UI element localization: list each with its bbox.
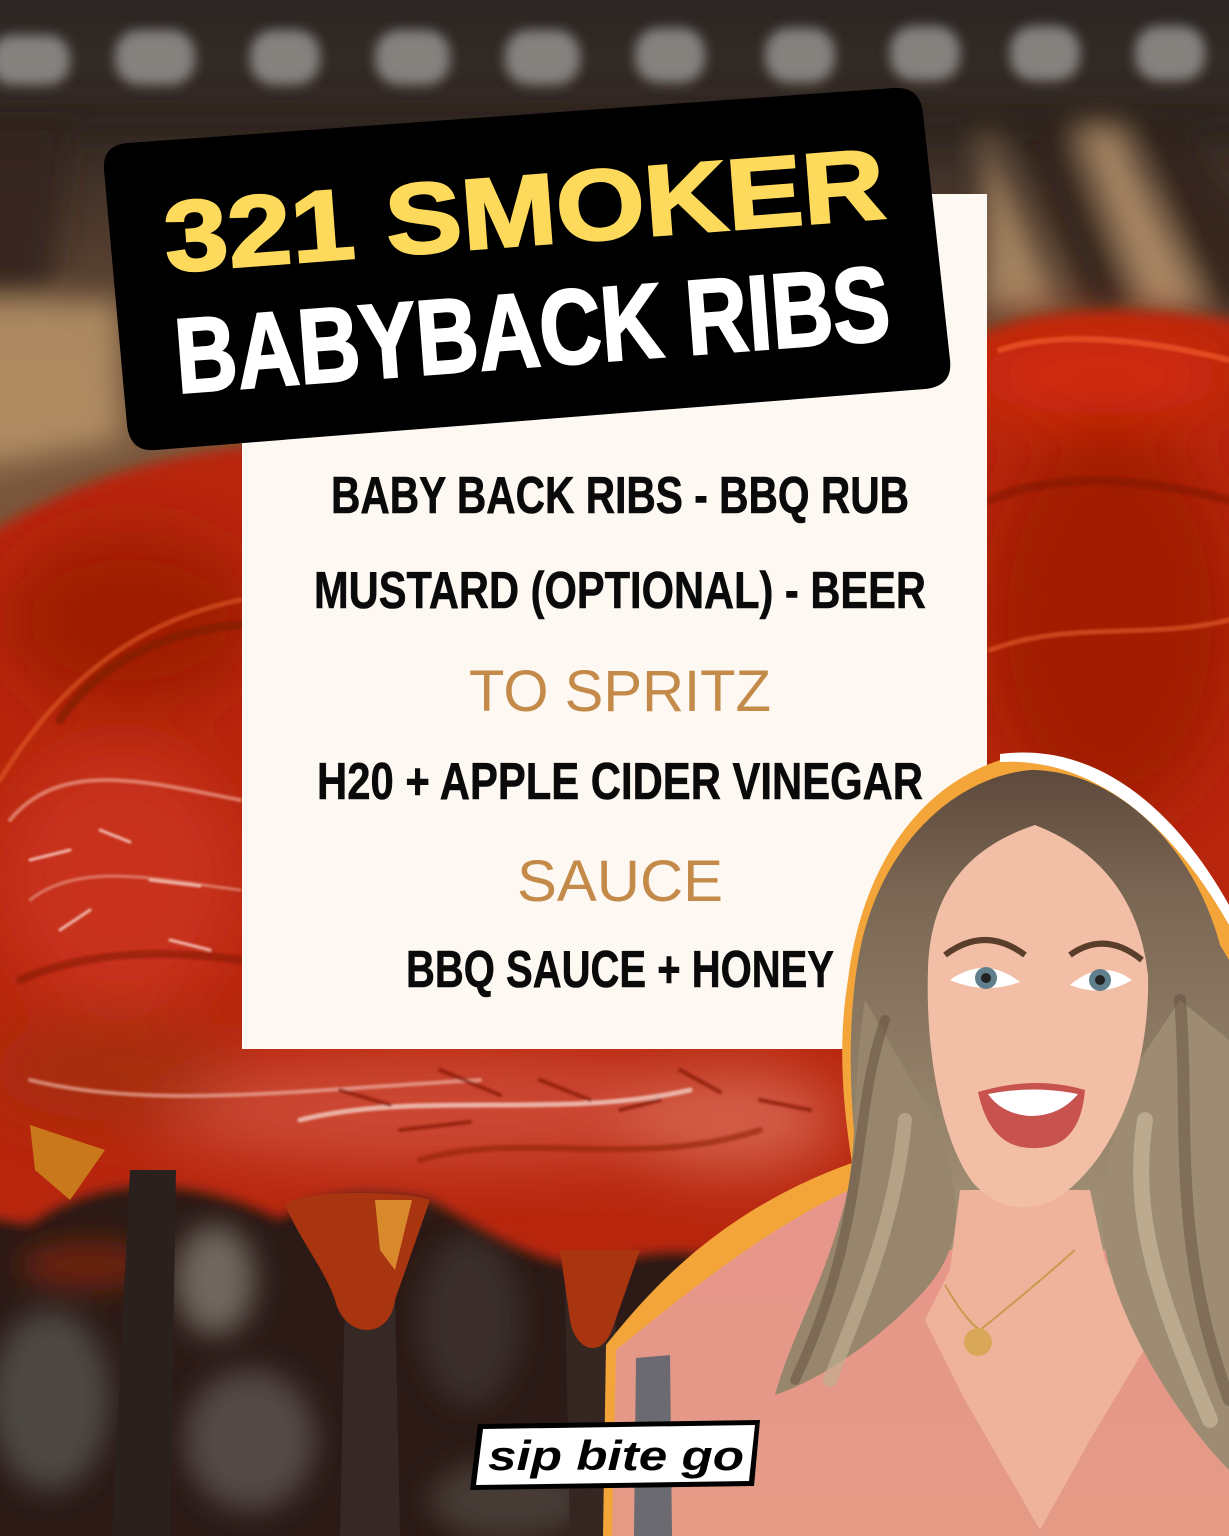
background: blurred lower grill	[0, 1225, 590, 1536]
portrait: tongs	[634, 1355, 672, 1536]
portrait: hair strands	[795, 1000, 1229, 1420]
portrait: outline	[603, 756, 1229, 1536]
portrait: necklace	[945, 1250, 1075, 1356]
grill bars with dripping sauce	[30, 1125, 640, 1536]
title line 1: 321 SMOKER	[160, 128, 889, 294]
portrait of presenter	[603, 752, 1229, 1536]
portrait: hair left lock	[775, 1000, 956, 1395]
portrait: face	[928, 825, 1148, 1207]
heading: to spritz: TO SPRITZ	[469, 659, 771, 724]
heading: sauce: SAUCE	[517, 849, 723, 914]
portrait: hair back	[851, 770, 1229, 1250]
portrait: neck and chest	[925, 1190, 1150, 1530]
title banner	[104, 88, 950, 450]
portrait: shirt	[612, 1185, 1229, 1536]
portrait: smiling mouth	[978, 1083, 1085, 1148]
ingredient panel	[242, 194, 987, 1049]
ribs: glazed red meat	[0, 311, 1229, 1290]
portrait: hair right lock	[1102, 1000, 1229, 1470]
portrait: eyes	[945, 940, 1142, 991]
ingredient: water and vinegar: H20 + APPLE CIDER VINEGAR	[317, 753, 923, 811]
ingredient: baby back ribs, bbq rub: BABY BACK RIBS - BBQ RUB	[331, 467, 909, 525]
title line 2: BABYBACK RIBS	[171, 245, 894, 416]
ingredient: mustard, beer: MUSTARD (OPTIONAL) - BEER	[314, 562, 926, 620]
ingredient: bbq sauce and honey: BBQ SAUCE + HONEY	[406, 941, 834, 999]
logo: sip bite go	[470, 1420, 760, 1490]
ribs: glaze ridges	[0, 339, 1229, 1160]
logo text: sip bite go	[488, 1432, 744, 1479]
background: blurred grill top	[0, 0, 1229, 720]
